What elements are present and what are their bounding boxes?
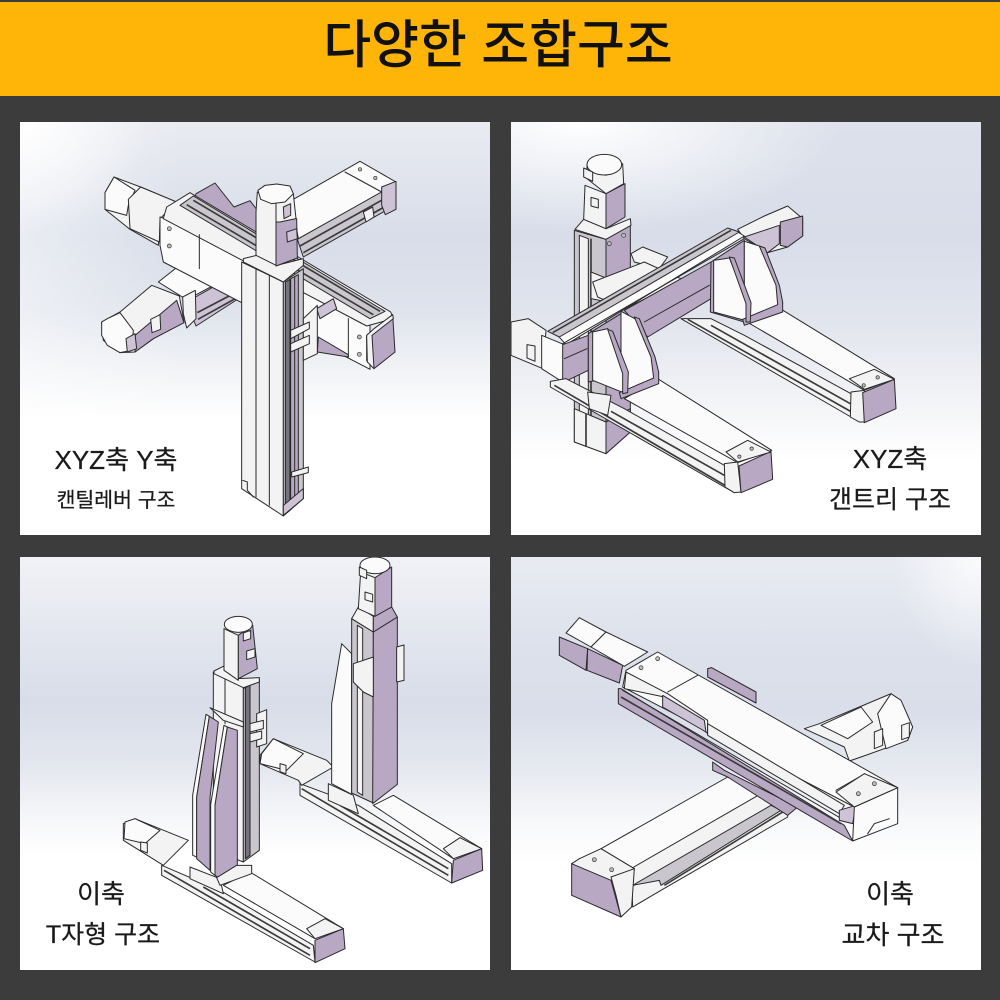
diagram: cantilever assembly <box>101 160 396 516</box>
X beam <box>160 193 395 369</box>
text: gantry structure: 갠트리 구조 <box>829 486 951 514</box>
rear rail <box>681 309 896 423</box>
rear motor <box>738 206 803 253</box>
diagram: T-shaped assemblies <box>122 557 484 964</box>
panel: XYZ axis gantry structure <box>511 122 981 535</box>
panel: XYZ axis cantilever structure <box>20 122 490 535</box>
diagram: cross assembly <box>558 617 914 918</box>
text: XYZ axis: XYZ축 <box>853 444 927 474</box>
lower left motor and arm <box>102 264 243 353</box>
vertical column <box>242 262 317 516</box>
slider between rails <box>593 247 684 309</box>
text: two axis: 이축 <box>866 879 914 909</box>
left motor <box>105 177 177 245</box>
text: two axis: 이축 <box>77 879 125 909</box>
diagram: gantry assembly <box>511 154 896 494</box>
lower beam <box>572 762 798 917</box>
panel: two axis T structure <box>20 557 490 970</box>
lower column end <box>574 409 630 454</box>
front assembly rail <box>162 865 345 963</box>
front plates <box>193 708 252 885</box>
front assembly motor <box>123 819 188 865</box>
left motor <box>559 618 648 683</box>
left motor and front gantry end <box>511 319 588 383</box>
text: cantilever structure: 캔틸레버 구조 <box>57 489 175 512</box>
header banner <box>0 2 1000 96</box>
text: T structure: T자형 구조 <box>46 921 160 949</box>
rear lilac brackets <box>193 183 259 235</box>
rear assembly rail <box>300 784 483 883</box>
lilac gantry beam underside <box>624 262 711 337</box>
rear bracket <box>708 668 756 703</box>
gantry beam rails <box>548 228 744 345</box>
column top flange and motor <box>243 184 303 282</box>
right motor <box>804 694 913 761</box>
front column <box>213 616 267 862</box>
rear white plate <box>332 644 352 794</box>
rear assembly motor <box>260 739 333 785</box>
front bracket <box>588 311 659 399</box>
title: 다양한 조합구조 <box>323 17 673 75</box>
vertical axis motor and column <box>574 154 631 454</box>
rear bracket <box>710 240 783 325</box>
upper right arm <box>292 161 396 257</box>
front rail <box>550 379 773 493</box>
upper beam <box>618 652 898 841</box>
panel: two axis cross structure <box>511 557 981 970</box>
text: cross structure: 교차 구조 <box>842 920 944 950</box>
rear column <box>352 557 404 804</box>
text: XYZ axis Y axis: XYZ축 Y축 <box>54 445 177 475</box>
